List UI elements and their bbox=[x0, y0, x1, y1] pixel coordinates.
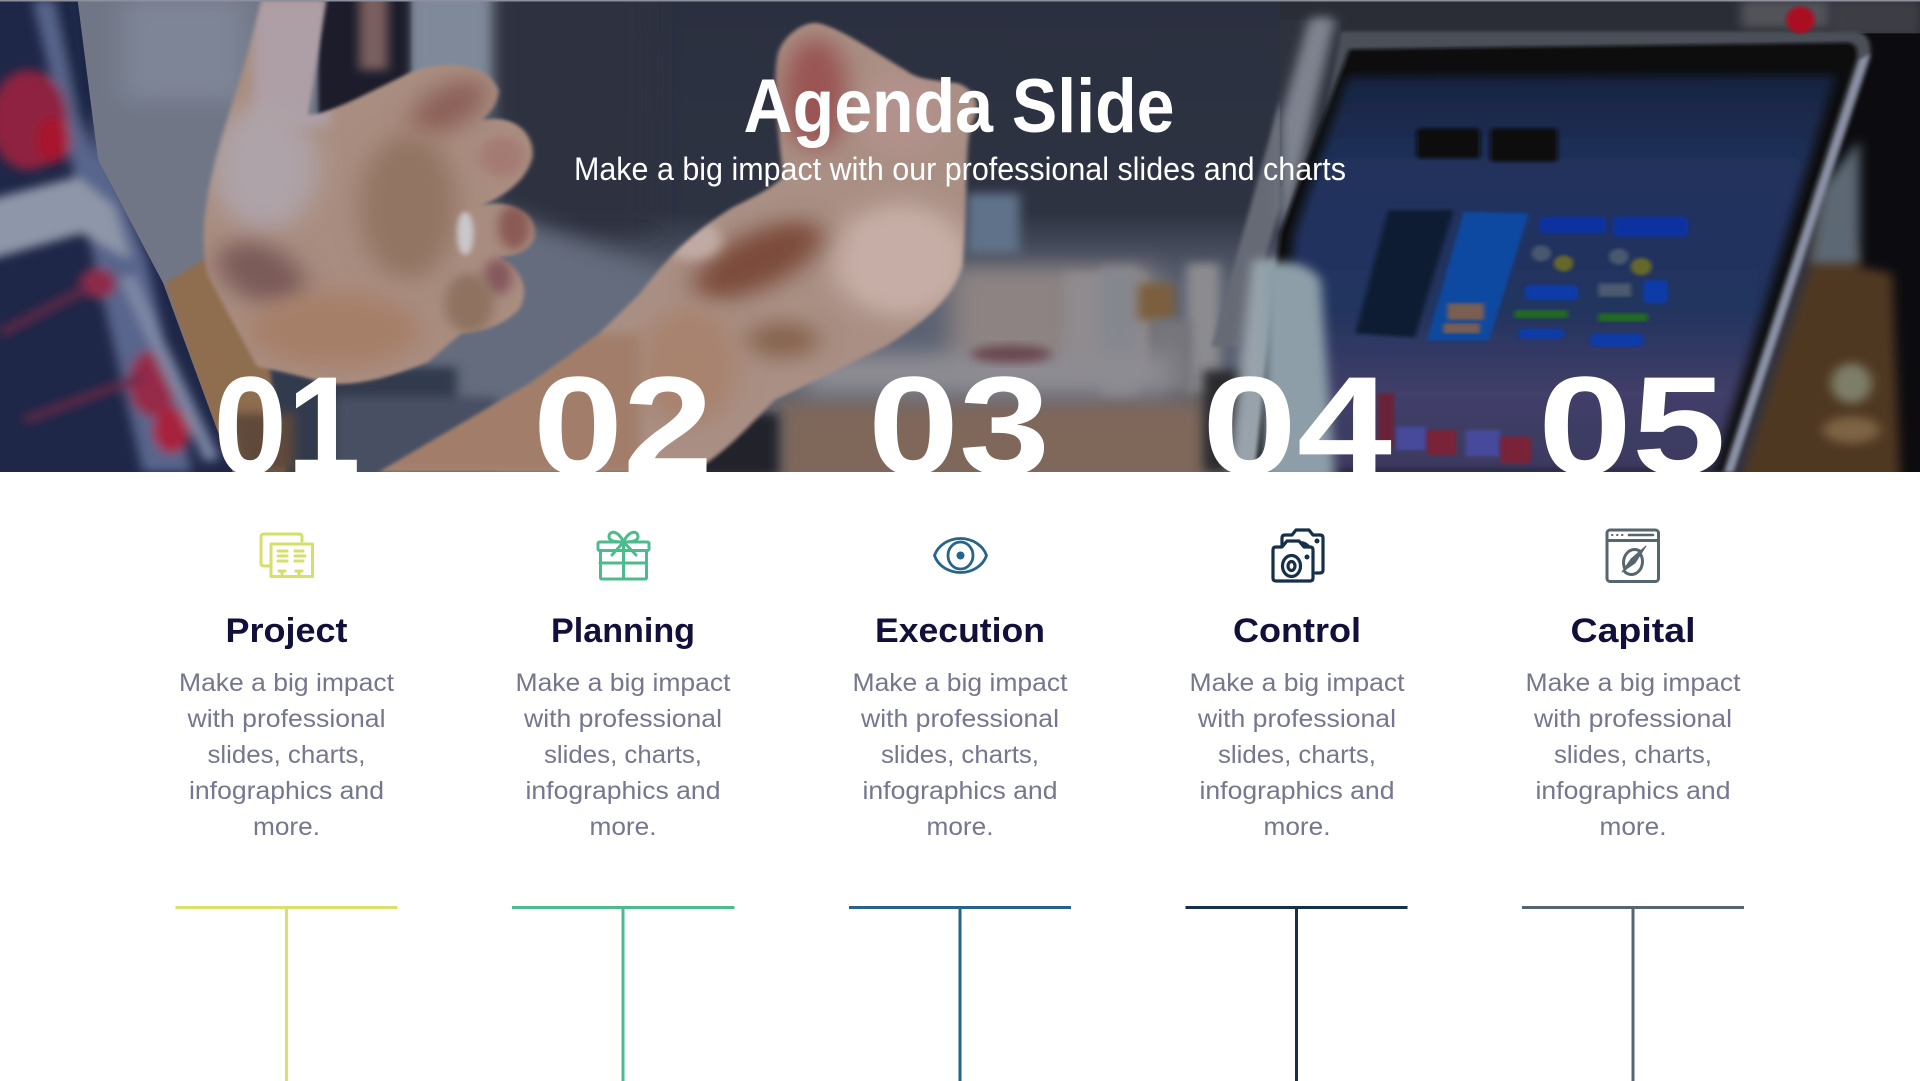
heading: control: Control bbox=[1233, 612, 1361, 650]
text: execution bbox=[852, 669, 1068, 841]
number 01: 01 bbox=[214, 347, 360, 504]
text: capital bbox=[1526, 669, 1741, 841]
text: planning: with professional bbox=[523, 705, 722, 733]
connector: planning bbox=[512, 908, 734, 1081]
text: project: Make a big impact bbox=[179, 669, 394, 697]
text: planning: infographics and bbox=[526, 777, 720, 805]
text: control: infographics and bbox=[1200, 777, 1394, 805]
subtitle: Make a big impact with our professional slides and charts bbox=[574, 151, 1346, 187]
icon: project cards bbox=[261, 534, 312, 576]
heading: execution: Execution bbox=[875, 612, 1045, 650]
text: execution: more. bbox=[926, 813, 994, 841]
text: capital: more. bbox=[1600, 813, 1666, 841]
text: execution: Make a big impact bbox=[852, 669, 1068, 697]
panel: control bbox=[1186, 530, 1408, 1081]
number 02: 02 bbox=[533, 347, 713, 504]
text: control bbox=[1190, 669, 1405, 841]
white panel bbox=[0, 472, 1920, 1081]
text: planning: more. bbox=[590, 813, 656, 841]
number 05: 05 bbox=[1538, 347, 1726, 504]
text: execution: with professional bbox=[860, 705, 1059, 733]
text: planning bbox=[516, 669, 731, 841]
text: execution: slides, charts, bbox=[881, 741, 1039, 769]
photo: centre hand bbox=[371, 0, 991, 472]
panel: execution bbox=[849, 538, 1071, 1081]
laptop bezel bbox=[1256, 32, 1871, 472]
text: project: more. bbox=[253, 813, 320, 841]
text: control: with professional bbox=[1197, 705, 1396, 733]
photo: left section bbox=[0, 0, 661, 487]
icon: eye bbox=[934, 538, 986, 572]
connector: control bbox=[1186, 908, 1408, 1081]
text: capital: with professional bbox=[1533, 705, 1732, 733]
heading: project: Project bbox=[226, 612, 348, 650]
text: execution: infographics and bbox=[862, 777, 1058, 805]
plaid shirt bbox=[0, 0, 249, 472]
panel: project bbox=[176, 534, 398, 1081]
connector: project bbox=[176, 908, 398, 1081]
connector: execution bbox=[849, 908, 1071, 1081]
text: planning: Make a big impact bbox=[516, 669, 731, 697]
laptop hinge bar bbox=[1280, 17, 1335, 233]
icon: browser compass bbox=[1607, 530, 1658, 582]
icon: cameras bbox=[1273, 530, 1323, 581]
text: control: slides, charts, bbox=[1218, 741, 1376, 769]
red spot and table bbox=[1786, 7, 1815, 33]
text: capital: infographics and bbox=[1536, 777, 1730, 805]
title: Agenda Slide bbox=[744, 64, 1174, 149]
text: project bbox=[179, 669, 394, 841]
text: control: more. bbox=[1264, 813, 1330, 841]
forearm under hand 1 bbox=[165, 257, 286, 472]
text: capital: slides, charts, bbox=[1554, 741, 1712, 769]
text: planning: slides, charts, bbox=[544, 741, 702, 769]
icon: gift box bbox=[598, 532, 649, 579]
hand 1 bbox=[188, 0, 547, 400]
heading: planning: Planning bbox=[551, 612, 695, 650]
photo: centre background bbox=[580, 104, 1281, 472]
panel: planning bbox=[512, 532, 734, 1081]
text: project: with professional bbox=[186, 705, 386, 733]
number 04: 04 bbox=[1202, 347, 1392, 504]
panel: capital bbox=[1522, 530, 1744, 1081]
text: project: slides, charts, bbox=[208, 741, 366, 769]
cup bbox=[1264, 262, 1335, 480]
number 03: 03 bbox=[868, 347, 1050, 504]
photo: laptop section bbox=[1256, 0, 1920, 483]
hero photo background bbox=[0, 0, 1920, 487]
heading: capital: Capital bbox=[1570, 612, 1696, 650]
connector: capital bbox=[1522, 908, 1744, 1081]
text: project: infographics and bbox=[189, 777, 384, 805]
text: capital: Make a big impact bbox=[1526, 669, 1741, 697]
text: control: Make a big impact bbox=[1190, 669, 1405, 697]
